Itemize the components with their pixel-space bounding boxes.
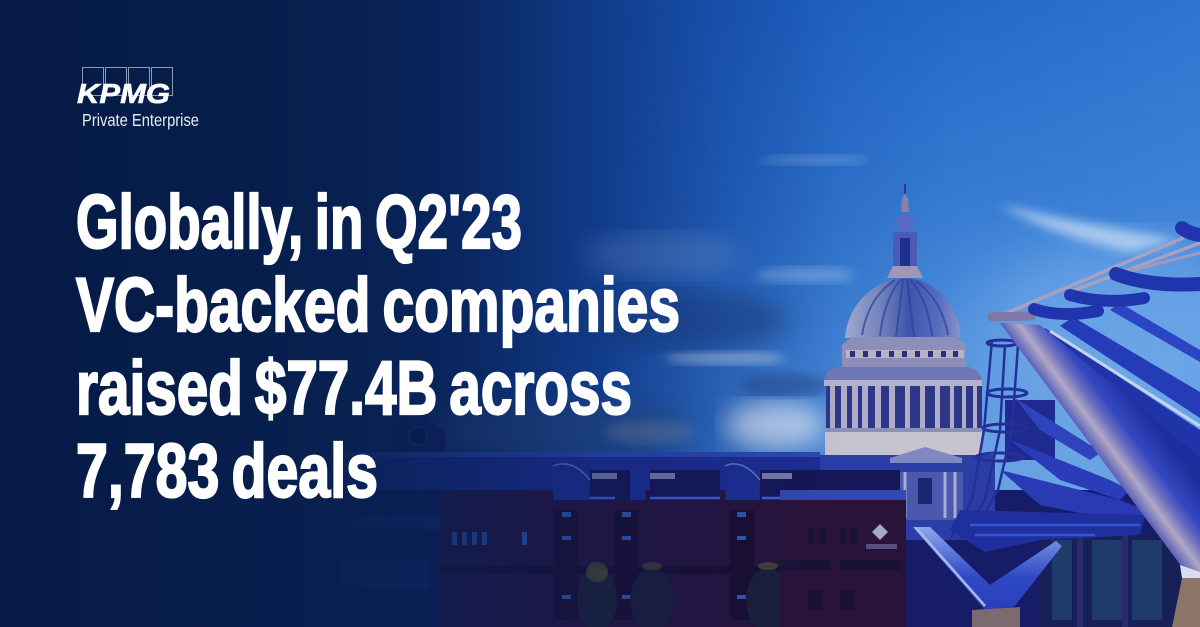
headline line 1: Globally, in Q2'23 [76, 180, 522, 265]
clock tower [392, 405, 445, 452]
bridge upper struts [1040, 303, 1200, 500]
illustration: skyline buildings [0, 405, 906, 627]
ground fill behind the scene [340, 490, 1200, 627]
left dark town [0, 490, 440, 627]
KPMG wordmark: KPMG [77, 78, 170, 109]
City of London School building [780, 490, 906, 627]
Private Enterprise label: Private Enterprise [82, 110, 199, 130]
sky background [398, 0, 1200, 490]
cathedral colonnade [825, 386, 982, 455]
bridge V-shaped pier [913, 527, 1062, 627]
bridge deck [950, 398, 1145, 552]
illustration: Millennium Bridge [913, 228, 1200, 627]
cathedral lantern and cross [887, 184, 923, 278]
icon: KPMG boxes [82, 68, 172, 96]
bridge main arm [1000, 323, 1200, 627]
trees [577, 562, 790, 627]
office block behind bridge [1040, 535, 1185, 627]
bridge rails and clamps [992, 228, 1200, 318]
clouds [430, 155, 1180, 460]
bridge suspension cables [950, 340, 1027, 540]
cathedral facade [780, 447, 995, 540]
distant blue ridge [340, 452, 820, 512]
maroon building [440, 464, 906, 627]
logo: KPMG Private Enterprise [77, 68, 199, 130]
illustration: St Paul's Cathedral [780, 184, 995, 540]
cathedral drum [824, 337, 982, 386]
headline line 3: raised $77.4B across [76, 346, 632, 431]
headline line 4: 7,783 deals [76, 429, 378, 514]
distant tower [1005, 400, 1055, 460]
headline [76, 180, 680, 514]
cathedral dome [845, 278, 961, 338]
headline line 2: VC-backed companies [76, 263, 680, 348]
